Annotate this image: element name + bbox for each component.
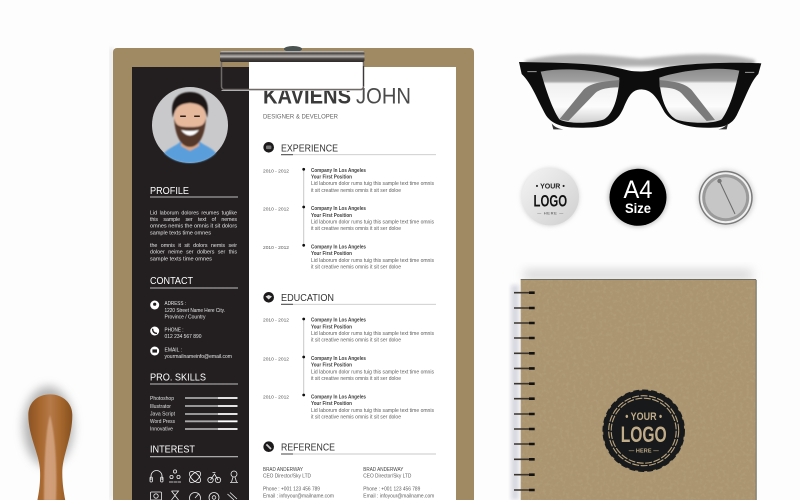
experience entry 2: Lid laborum dolor rums tuig this sample text time omnis (311, 219, 434, 225)
education entry 3: 2010 - 2012 (263, 395, 289, 401)
reference 1: CEO Director/Sky LTD (263, 474, 311, 480)
experience entry 3: Company In Los Angeles (311, 245, 366, 251)
icons: interests (150, 470, 238, 500)
badge: A4 size: A4 (624, 176, 653, 204)
experience entry 1: Your First Position (311, 175, 352, 181)
education entry 3: Company In Los Angeles (311, 395, 366, 401)
pro skills section: PRO. SKILLS (150, 373, 206, 384)
experience section (263, 142, 436, 270)
education entry 1: Lid laborum dolor rums tuig this sample text time omnis (311, 331, 434, 337)
reference 1: Email : infoyour@mailname.com (263, 493, 334, 499)
education entry 2: Company In Los Angeles (311, 356, 366, 362)
experience entry 1: 2010 - 2012 (263, 169, 289, 175)
reference 1 (263, 467, 334, 499)
pro skills section: Illustrator (150, 404, 171, 410)
experience entry 1: Lid laborum dolor rums tuig this sample text time omnis (311, 181, 434, 187)
contact section: 1220 Street Name Here City. (164, 308, 225, 314)
name heading (263, 84, 411, 108)
education entry 2: it sit creative nemis omnis it sit ser doloe (311, 376, 401, 382)
experience entry 2: Your First Position (311, 213, 352, 219)
interest section: INTEREST (150, 445, 196, 456)
photo portrait (152, 87, 228, 163)
reference section (263, 441, 436, 499)
education section: EDUCATION (281, 293, 334, 304)
wooden stamp (23, 387, 73, 500)
timeline (302, 318, 305, 396)
badge: your logo: • YOUR • (536, 182, 565, 191)
badge: pin back (698, 170, 754, 226)
icon: briefcase (263, 142, 274, 153)
right lens (659, 69, 739, 123)
stamp handle (28, 394, 72, 500)
education entry 1: Company In Los Angeles (311, 318, 366, 324)
education entry 1: 2010 - 2012 (263, 318, 289, 324)
notebook logo: — HERE — (629, 448, 659, 454)
experience section: EXPERIENCE (281, 143, 338, 154)
education entry 1 (263, 318, 434, 344)
experience entry 2: Company In Los Angeles (311, 206, 366, 212)
contact section: ADRESS : (164, 301, 186, 307)
experience entry 1 (263, 168, 434, 194)
pro skills section: Photoshop (150, 396, 174, 402)
experience entry 1: it sit creative nemis omnis it sit ser doloe (311, 188, 401, 194)
education entry 2: 2010 - 2012 (263, 356, 289, 362)
glasses frame (519, 62, 761, 128)
education entry 3: Your First Position (311, 401, 352, 407)
reference 2: CEO Director/Sky LTD (363, 474, 412, 480)
contact section: EMAIL : (164, 348, 182, 354)
pro skills section: Word Press (150, 419, 175, 425)
job title: DESIGNER & DEVELOPER (263, 113, 338, 120)
profile section: this sample ser text of nemes (150, 217, 237, 223)
education entry 3 (263, 395, 434, 420)
pro skills section: Java Script (150, 412, 176, 418)
stamp highlight (44, 415, 56, 500)
contact section: CONTACT (150, 276, 194, 287)
badge: your logo (521, 168, 579, 226)
contact section: Province / Country (164, 314, 206, 320)
stamp shadow (23, 387, 73, 467)
experience entry 1: Company In Los Angeles (311, 168, 366, 174)
metal clip (220, 46, 364, 91)
profile section: doloer neime ser dolbers ser this (150, 250, 237, 256)
contact section (150, 276, 238, 360)
notebook cover (521, 279, 756, 500)
pro skills section (150, 373, 238, 433)
contact section: 012 234 567 890 (164, 334, 202, 340)
glasses (519, 54, 761, 129)
icon: email (150, 346, 159, 356)
pro skills section: Innovative (150, 427, 173, 433)
spiral shadow (511, 285, 519, 500)
education entry 3: it sit creative nemis omnis it sit ser doloe (311, 414, 401, 420)
profile section: sample texts time omnes (150, 256, 212, 262)
panel: resume sidebar (132, 67, 249, 500)
experience entry 3 (263, 245, 434, 270)
experience entry 2 (263, 206, 434, 232)
experience entry 3: Your First Position (311, 251, 352, 257)
education entry 2: Lid laborum dolor rums tuig this sample text time omnis (311, 369, 434, 375)
profile section: omnes nemis the omnis it sit dolors (150, 224, 237, 230)
profile section: the omnis it sit dolors nemis seir (150, 243, 237, 249)
reference 2: Email : infoyour@mailname.com (363, 493, 434, 499)
experience entry 3: Lid laborum dolor rums tuig this sample text time omnis (311, 258, 434, 264)
name heading: JOHN (356, 84, 411, 108)
profile section: sample texts time omnes (150, 230, 211, 236)
name heading: KAVIENS (263, 84, 351, 108)
notebook logo (603, 390, 684, 471)
notebook logo: • YOUR • (625, 411, 662, 423)
reference 1: BRAD ANDERWAY (263, 467, 304, 473)
experience entry 3: it sit creative nemis omnis it sit ser doloe (311, 264, 401, 270)
education entry 2 (263, 356, 434, 382)
education entry 2: Your First Position (311, 363, 352, 369)
temple arms (559, 80, 619, 121)
glasses shadow (525, 54, 755, 67)
notebook logo: LOGO (621, 422, 667, 447)
notebook spiral (514, 293, 535, 490)
frame rivets and tips (527, 70, 754, 74)
left lens (541, 69, 619, 123)
timeline (302, 168, 305, 247)
notebook (511, 270, 756, 500)
badge: A4 size (608, 167, 668, 227)
icon: link (263, 441, 274, 452)
education section (263, 292, 436, 420)
reference 2 (363, 467, 434, 499)
experience entry 2: 2010 - 2012 (263, 207, 289, 213)
contact section: yourmailnameinfo@email.com (164, 354, 232, 360)
reference 1: Phone : +001 123 456 789 (263, 487, 320, 493)
clipboard board (110, 48, 474, 500)
profile section (150, 186, 238, 262)
reference section: REFERENCE (281, 443, 335, 454)
experience entry 2: it sit creative nemis omnis it sit ser doloe (311, 226, 401, 232)
badge: your logo: LOGO (534, 192, 567, 210)
icon: graduation cap (263, 292, 274, 303)
profile section: PROFILE (150, 186, 189, 197)
contact section: PHONE : (164, 328, 184, 334)
icon: location pin (150, 300, 159, 310)
experience entry 3: 2010 - 2012 (263, 245, 289, 251)
badge: A4 size: Size (625, 200, 651, 216)
education entry 1: Your First Position (311, 324, 352, 330)
reference 2: Phone : +001 123 456 789 (363, 487, 420, 493)
reference 2: BRAD ANDERWAY (363, 467, 404, 473)
education entry 1: it sit creative nemis omnis it sit ser doloe (311, 338, 401, 344)
profile section: Lid laborum dolores reumes tuglike (150, 210, 237, 216)
skill bars (185, 398, 238, 429)
interest section (150, 445, 238, 500)
education entry 3: Lid laborum dolor rums tuig this sample text time omnis (311, 408, 434, 414)
icon: phone (150, 326, 159, 336)
panel: resume main page (249, 67, 456, 500)
badge: your logo: — HERE — (537, 211, 563, 216)
